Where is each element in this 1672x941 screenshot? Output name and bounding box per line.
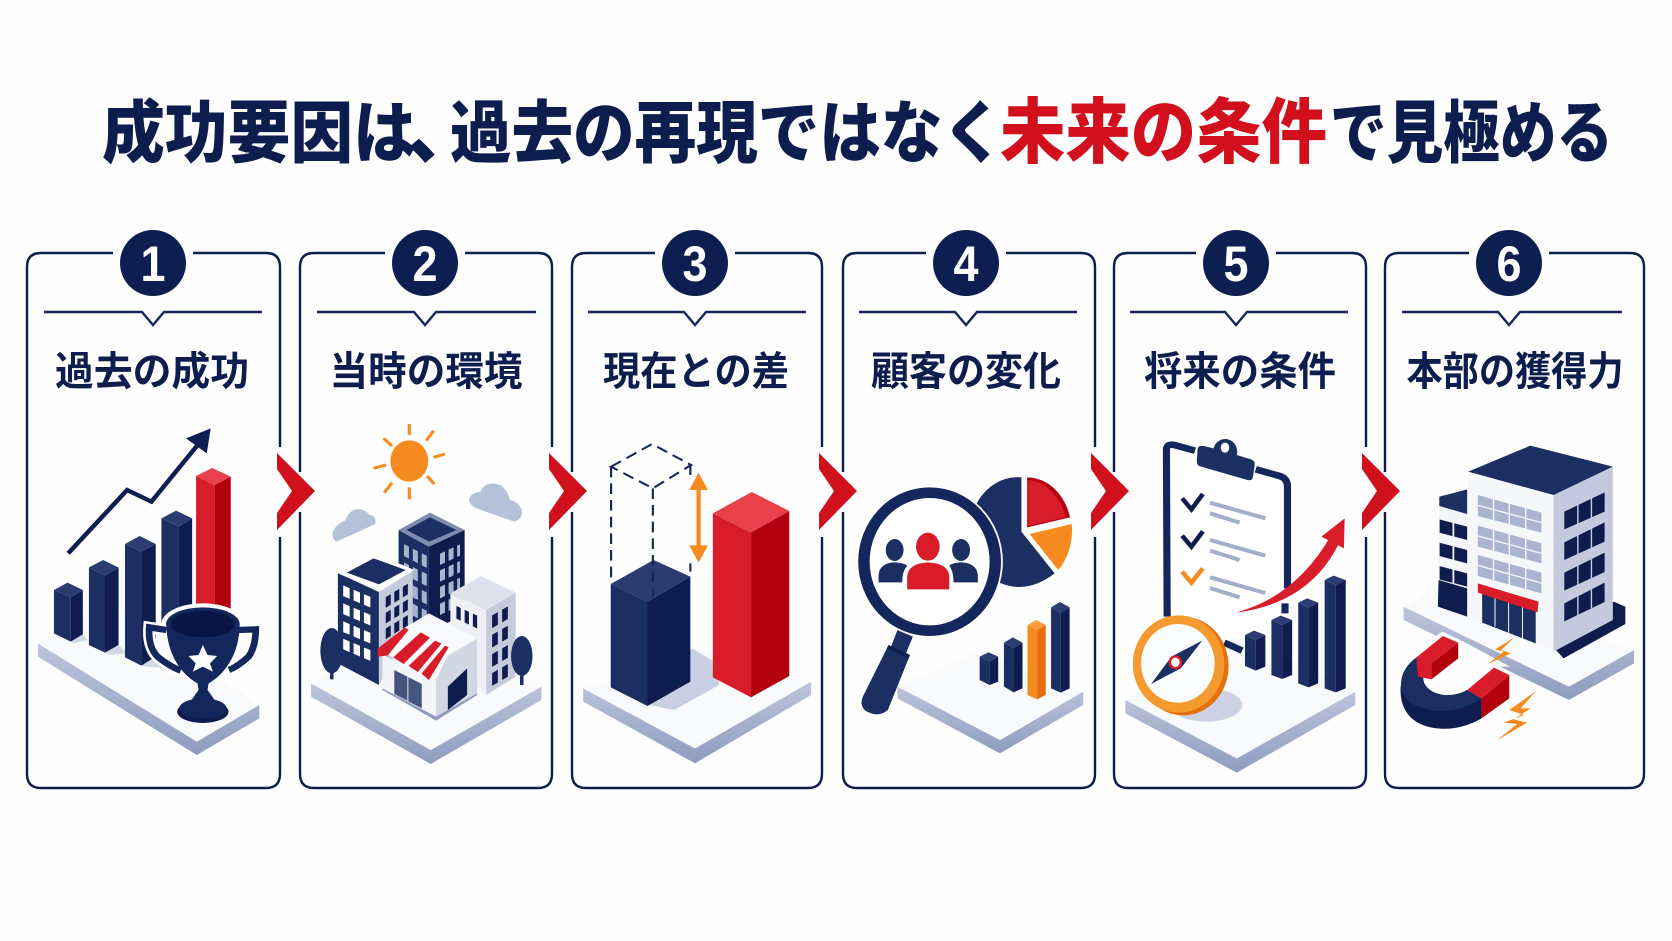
number badge 5: 5 bbox=[1224, 236, 1248, 292]
left building bbox=[338, 573, 379, 685]
panel: 2 environment at the time bbox=[300, 230, 552, 788]
red growth arrow bbox=[1236, 518, 1345, 613]
panel: 6 headquarters acquisition power bbox=[1385, 230, 1644, 788]
arrow 4 bbox=[1091, 453, 1129, 530]
growth bars bbox=[1245, 576, 1346, 692]
title: 未来の条件 bbox=[1000, 94, 1327, 173]
number badge 5 bbox=[1203, 230, 1269, 296]
red bar bbox=[713, 492, 789, 697]
heading: 将来の条件: 将来の条件 bbox=[1144, 350, 1336, 394]
clipboard bbox=[1166, 439, 1287, 653]
heading: 本部の獲得力: 本部の獲得力 bbox=[1406, 350, 1624, 394]
number badge 4 bbox=[933, 230, 999, 296]
sun bbox=[374, 424, 445, 499]
illustration: rising bars with trophy bbox=[38, 428, 259, 755]
arrow 2 bbox=[549, 453, 587, 530]
number badge 1 bbox=[120, 230, 186, 296]
building bbox=[1438, 446, 1625, 658]
number badge 2 bbox=[392, 230, 458, 296]
illustration: checklist, compass and growth bbox=[1125, 439, 1355, 773]
customers icon bbox=[879, 533, 978, 589]
number badge 2: 2 bbox=[412, 236, 438, 292]
number badge 3 bbox=[662, 230, 728, 296]
heading: 現在との差: 現在との差 bbox=[603, 350, 789, 394]
title: 、 bbox=[407, 90, 481, 173]
title: で見極める bbox=[1330, 96, 1613, 172]
number badge 1: 1 bbox=[140, 236, 166, 292]
title bbox=[102, 90, 1613, 173]
arrow 3 bbox=[819, 453, 857, 530]
panel: 4 customer change bbox=[843, 230, 1095, 788]
pie chart bbox=[970, 477, 1072, 587]
heading: 過去の成功: 過去の成功 bbox=[55, 350, 249, 394]
illustration: city block with shop, sun and clouds bbox=[311, 424, 541, 764]
heading: 顧客の変化: 顧客の変化 bbox=[871, 350, 1061, 394]
magnet bbox=[1401, 636, 1509, 729]
clouds bbox=[332, 509, 375, 542]
illustration: headquarters building and magnet bbox=[1401, 446, 1634, 741]
title: 成功要因は bbox=[102, 96, 416, 172]
number badge 4: 4 bbox=[954, 236, 979, 292]
trophy bbox=[149, 603, 256, 723]
panel: 3 gap with the present bbox=[572, 230, 822, 788]
illustration: past bar vs red bar bbox=[583, 444, 811, 763]
panel: 5 future conditions bbox=[1114, 230, 1366, 788]
magnifier bbox=[856, 486, 1003, 714]
back building bbox=[399, 530, 429, 633]
right building bbox=[450, 593, 486, 695]
number badge 6 bbox=[1476, 230, 1542, 296]
navy bar bbox=[611, 560, 690, 706]
compass bbox=[1133, 615, 1242, 722]
trees bbox=[320, 628, 532, 685]
dashed outline cube bbox=[611, 444, 691, 597]
number badge 3: 3 bbox=[682, 236, 708, 292]
title: 過去の再現ではなく bbox=[450, 96, 1004, 172]
illustration: magnifier, customers and charts bbox=[856, 477, 1083, 753]
shop bbox=[378, 613, 477, 721]
lightning bolts bbox=[1488, 637, 1536, 741]
panel: 1 past success bbox=[27, 230, 280, 788]
arrow 5 bbox=[1362, 453, 1400, 530]
arrow 1 bbox=[277, 453, 315, 530]
heading: 当時の環境: 当時の環境 bbox=[330, 350, 522, 394]
small bars bbox=[980, 602, 1070, 699]
number badge 6: 6 bbox=[1496, 236, 1522, 292]
orange double arrow bbox=[689, 473, 708, 563]
